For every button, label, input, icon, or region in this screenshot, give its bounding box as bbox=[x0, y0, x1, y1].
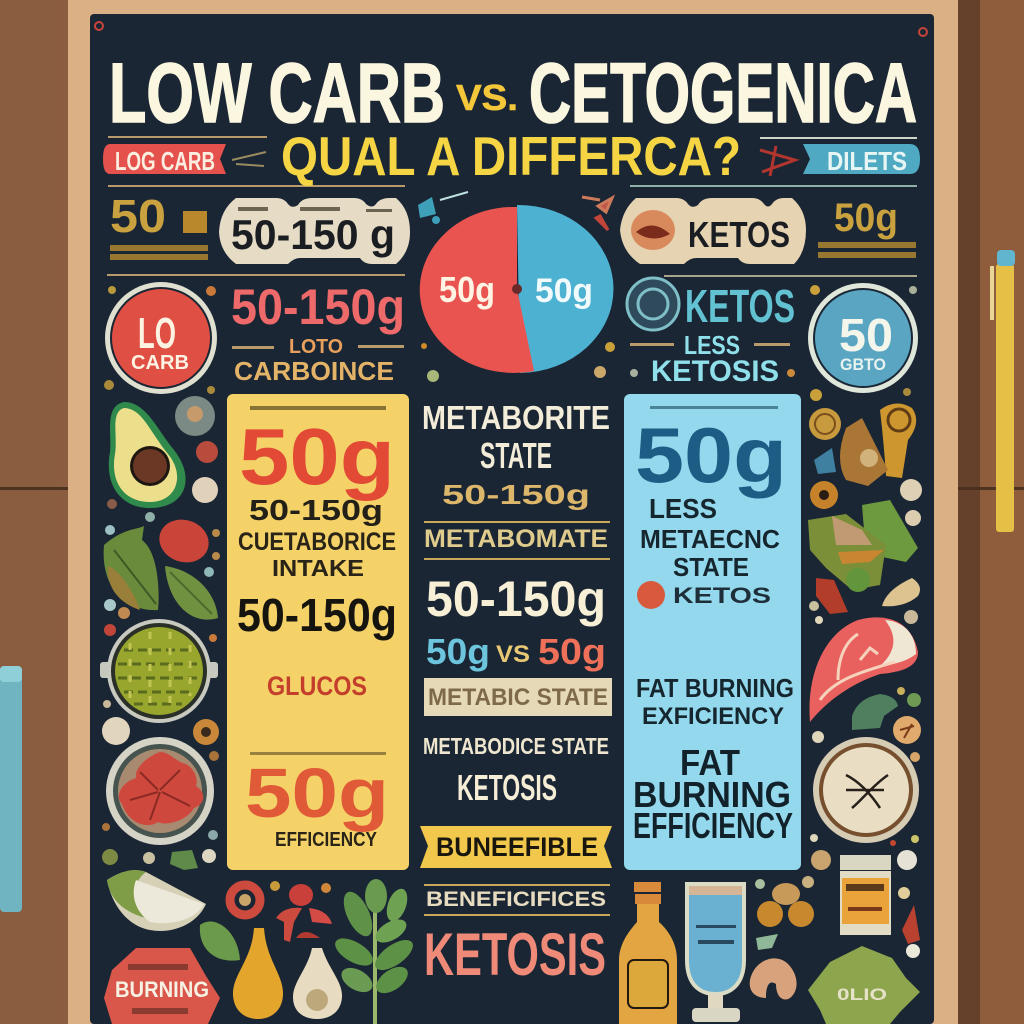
panel: low carb: INTAKE bbox=[272, 555, 364, 581]
icon: small foods left bbox=[102, 396, 220, 870]
icon: herbs small right bbox=[812, 687, 921, 762]
panel: ketogenic: FAT bbox=[680, 742, 740, 783]
icon: glass of water bbox=[687, 884, 744, 1022]
panel: ketogenic: 50g bbox=[635, 411, 787, 499]
panel: ketogenic: METAECNC bbox=[640, 524, 780, 554]
icon: leaves bbox=[104, 526, 218, 620]
icon: leaf bbox=[200, 922, 240, 961]
pie chart bbox=[420, 205, 613, 373]
pie chart: 50g bbox=[535, 272, 593, 310]
section rules bbox=[107, 136, 917, 277]
panel: low carb: 50-150g bbox=[249, 495, 383, 527]
central ketosis: KETOSIS bbox=[457, 767, 557, 808]
central column: METABORITE bbox=[422, 399, 610, 436]
panel: low carb: EFFICIENCY bbox=[275, 829, 378, 851]
pen: yellow bbox=[990, 250, 1015, 532]
panel: low carb: 50-150g bbox=[237, 589, 397, 641]
tag: diets: DILETS bbox=[827, 146, 907, 176]
panel: ketogenic: BURNING bbox=[633, 774, 791, 815]
badge: burning bbox=[104, 948, 220, 1024]
right heading bbox=[627, 278, 795, 388]
bottom ketosis: KETOSIS bbox=[424, 921, 606, 988]
pill: 50-150g: 50-150 g bbox=[231, 211, 395, 258]
tag: low carb: LOG CARB bbox=[115, 146, 215, 176]
tag: diets bbox=[760, 144, 920, 176]
central column: 50g bbox=[538, 631, 606, 672]
pill: ketos bbox=[620, 198, 806, 264]
banner: metabolic state: METABIC STATE bbox=[428, 684, 608, 711]
icon: steak bbox=[809, 617, 918, 722]
badge: low carb: CARB bbox=[131, 352, 189, 374]
panel: low carb: 50g bbox=[239, 412, 395, 501]
panel: ketogenic: STATE bbox=[673, 552, 749, 582]
icon: round bread bbox=[813, 737, 919, 843]
left top 50g: 50 bbox=[110, 190, 166, 242]
icon: tomato bbox=[154, 513, 214, 569]
icon: herb plant bbox=[331, 879, 418, 1024]
icon: guacamole bowl bbox=[100, 619, 218, 723]
left heading: LOTO bbox=[289, 336, 343, 358]
central ketosis bbox=[423, 733, 609, 808]
central column: 50g bbox=[426, 631, 490, 672]
title: VS. bbox=[456, 77, 518, 118]
icon: nuts and greens right bbox=[808, 403, 922, 624]
left heading bbox=[231, 279, 405, 386]
left top 50g bbox=[110, 190, 208, 260]
banner: benefits: BUNEEFIBLE bbox=[436, 832, 598, 862]
title: LOW CARB bbox=[109, 46, 445, 140]
benefits heading: BENEFICIFICES bbox=[426, 888, 606, 911]
badge: burning: BURNING bbox=[115, 977, 209, 1002]
subtitle: QUAL A DIFFERCA? bbox=[281, 125, 741, 187]
icon: red ring and flowers bbox=[230, 881, 332, 942]
pill: ketos: KETOS bbox=[688, 214, 790, 255]
icon: avocado bbox=[109, 402, 186, 508]
central column: VS bbox=[496, 641, 530, 668]
icon: oil drops bbox=[233, 928, 342, 1019]
panel: ketogenic: EFFICIENCY bbox=[633, 805, 793, 846]
badge: low carb bbox=[105, 282, 217, 394]
icon: nuts bottom right bbox=[750, 876, 814, 999]
right top 50g bbox=[818, 196, 916, 258]
pill: 50-150g bbox=[219, 198, 410, 264]
icon: meat bowl bbox=[106, 737, 214, 845]
central ketosis: METABODICE STATE bbox=[423, 733, 609, 759]
left heading: CARBOINCE bbox=[234, 356, 394, 386]
icon: avocado half bbox=[107, 870, 206, 931]
icon: oil bottle bbox=[619, 882, 677, 1024]
panel: low carb: GLUCOS bbox=[267, 671, 367, 701]
badge: 50g bbox=[808, 283, 918, 393]
central column: 50-150g bbox=[442, 479, 590, 510]
title bbox=[109, 46, 917, 140]
pins bbox=[95, 22, 927, 36]
banner: metabolic state bbox=[424, 678, 612, 716]
central column: 50-150g bbox=[426, 571, 606, 627]
badge: green bottom right bbox=[808, 946, 920, 1024]
panel: ketogenic: LESS bbox=[649, 493, 717, 524]
panel: ketogenic: EXFICIENCY bbox=[642, 703, 784, 730]
badge: green bottom right: 0LIO bbox=[837, 985, 887, 1004]
panel: low carb: 50g bbox=[245, 754, 389, 832]
pie chart: 50g bbox=[439, 269, 495, 310]
right heading: LESS bbox=[684, 330, 740, 360]
central column: METABOMATE bbox=[424, 525, 608, 553]
panel: low carb: CUETABORICE bbox=[238, 528, 396, 556]
badge: 50g: 50 bbox=[839, 309, 893, 361]
panel: ketogenic bbox=[624, 394, 801, 870]
right heading: KETOS bbox=[685, 280, 795, 332]
icon: small foods right bottom bbox=[810, 834, 920, 958]
right top 50g: 50g bbox=[834, 196, 898, 240]
small decorative foods around pie bbox=[104, 192, 917, 401]
banner: benefits bbox=[420, 826, 612, 868]
central column: STATE bbox=[480, 435, 552, 476]
badge: 50g: GBTO bbox=[840, 355, 886, 374]
central column bbox=[422, 399, 610, 672]
right heading: KETOSIS bbox=[651, 355, 779, 388]
badge: low carb: LO bbox=[138, 309, 176, 358]
panel: ketogenic: KETOS bbox=[673, 583, 771, 608]
icon: jar bbox=[840, 855, 891, 935]
left heading: 50-150g bbox=[231, 279, 405, 335]
panel: ketogenic: FAT BURNING bbox=[636, 673, 794, 703]
pen: blue bbox=[0, 666, 22, 912]
panel: low carb bbox=[227, 394, 409, 870]
